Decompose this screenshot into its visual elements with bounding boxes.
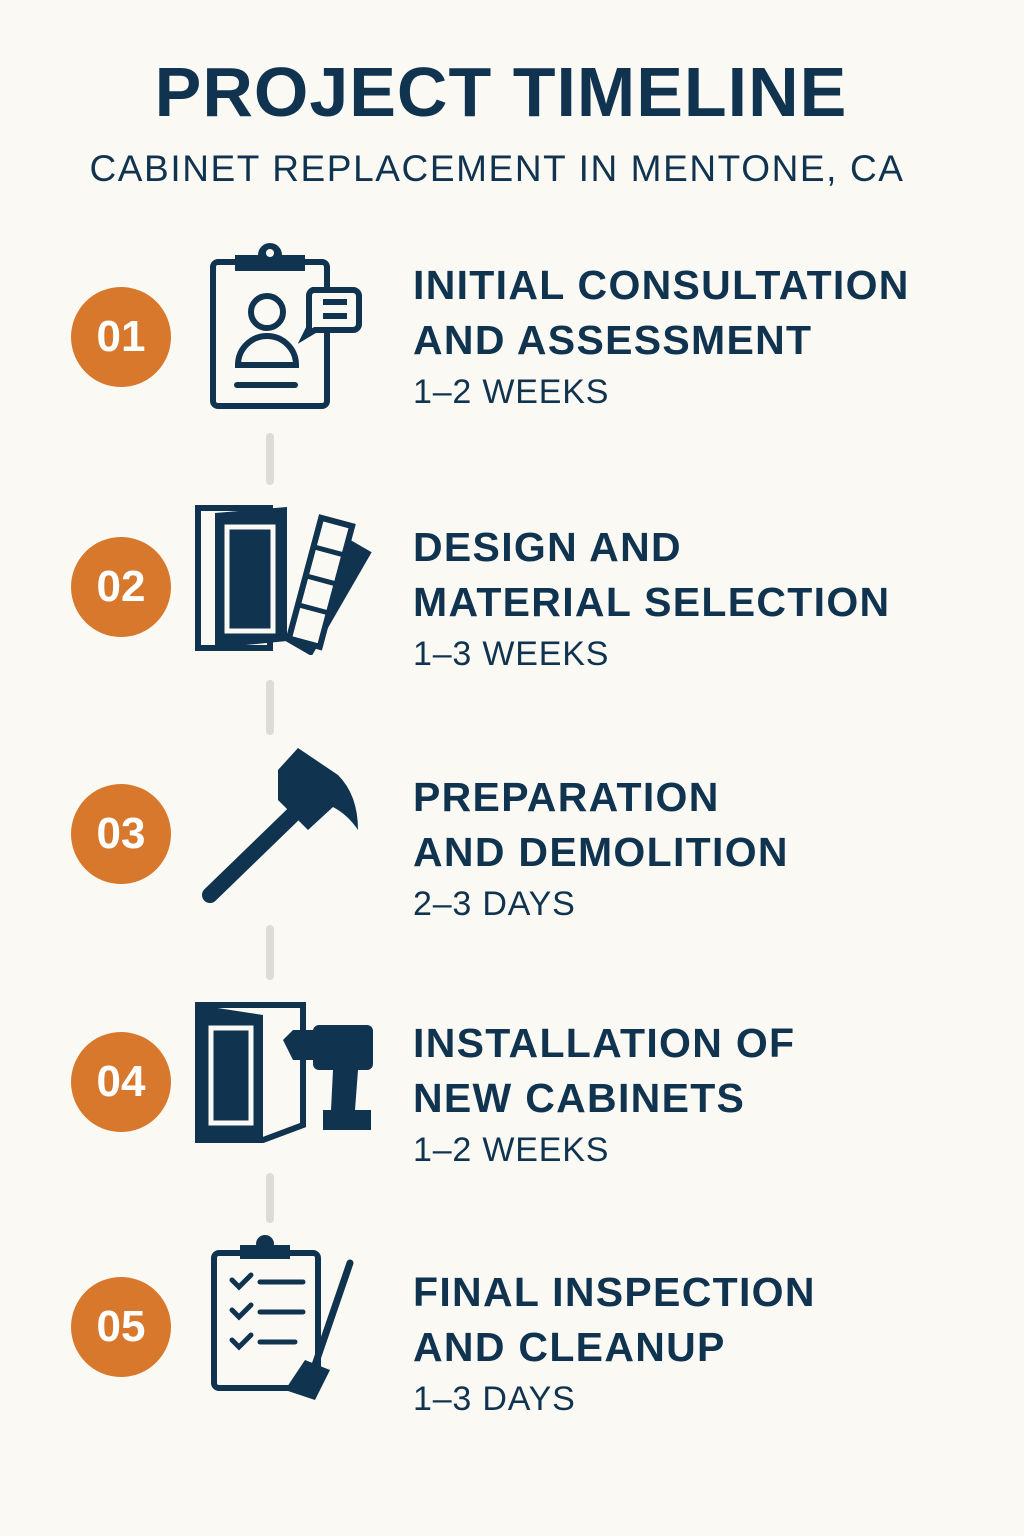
subtitle: CABINET REPLACEMENT IN MENTONE, CA [89, 148, 905, 189]
step 1 text: 1–2 WEEKS [413, 373, 609, 411]
step 2 text: 1–3 WEEKS [413, 635, 609, 673]
icon: hammer [202, 748, 358, 903]
step 5 text: FINAL INSPECTION [413, 1269, 816, 1315]
icon: cabinet and drill [195, 1002, 373, 1143]
step 2 badge [71, 537, 171, 637]
step 3 badge [71, 784, 171, 884]
step 2 text: DESIGN AND [413, 524, 682, 570]
connector 2 [266, 680, 274, 735]
step 4 badge: 04 [97, 1057, 145, 1106]
icon: clipboard consultation [210, 243, 362, 409]
step 3 text: 2–3 DAYS [413, 885, 576, 923]
step 2 text: MATERIAL SELECTION [413, 579, 890, 625]
step 5 text [413, 1269, 816, 1418]
connector 3 [266, 925, 274, 980]
step 5 text: AND CLEANUP [413, 1324, 726, 1370]
step 4 text: NEW CABINETS [413, 1075, 745, 1121]
step 5 text: 1–3 DAYS [413, 1380, 576, 1418]
step 3 badge: 03 [97, 809, 145, 858]
icon: door and swatches [195, 505, 372, 655]
connector 4 [266, 1173, 274, 1223]
step 3 text [413, 774, 789, 923]
step 1 text [413, 262, 910, 411]
icon: checklist and broom [211, 1235, 354, 1400]
step 2 badge: 02 [97, 562, 145, 611]
title: PROJECT TIMELINE [155, 53, 847, 131]
step 4 text [413, 1020, 795, 1169]
step 5 badge: 05 [97, 1302, 145, 1351]
step 3 text: AND DEMOLITION [413, 829, 789, 875]
step 2 text [413, 524, 890, 673]
step 4 text: 1–2 WEEKS [413, 1131, 609, 1169]
step 3 text: PREPARATION [413, 774, 720, 820]
step 1 text: AND ASSESSMENT [413, 317, 812, 363]
connector 1 [266, 433, 274, 485]
step 1 badge: 01 [97, 312, 145, 361]
step 1 text: INITIAL CONSULTATION [413, 262, 910, 308]
step 5 badge [71, 1277, 171, 1377]
step 4 badge [71, 1032, 171, 1132]
step 1 badge [71, 287, 171, 387]
step 4 text: INSTALLATION OF [413, 1020, 795, 1066]
